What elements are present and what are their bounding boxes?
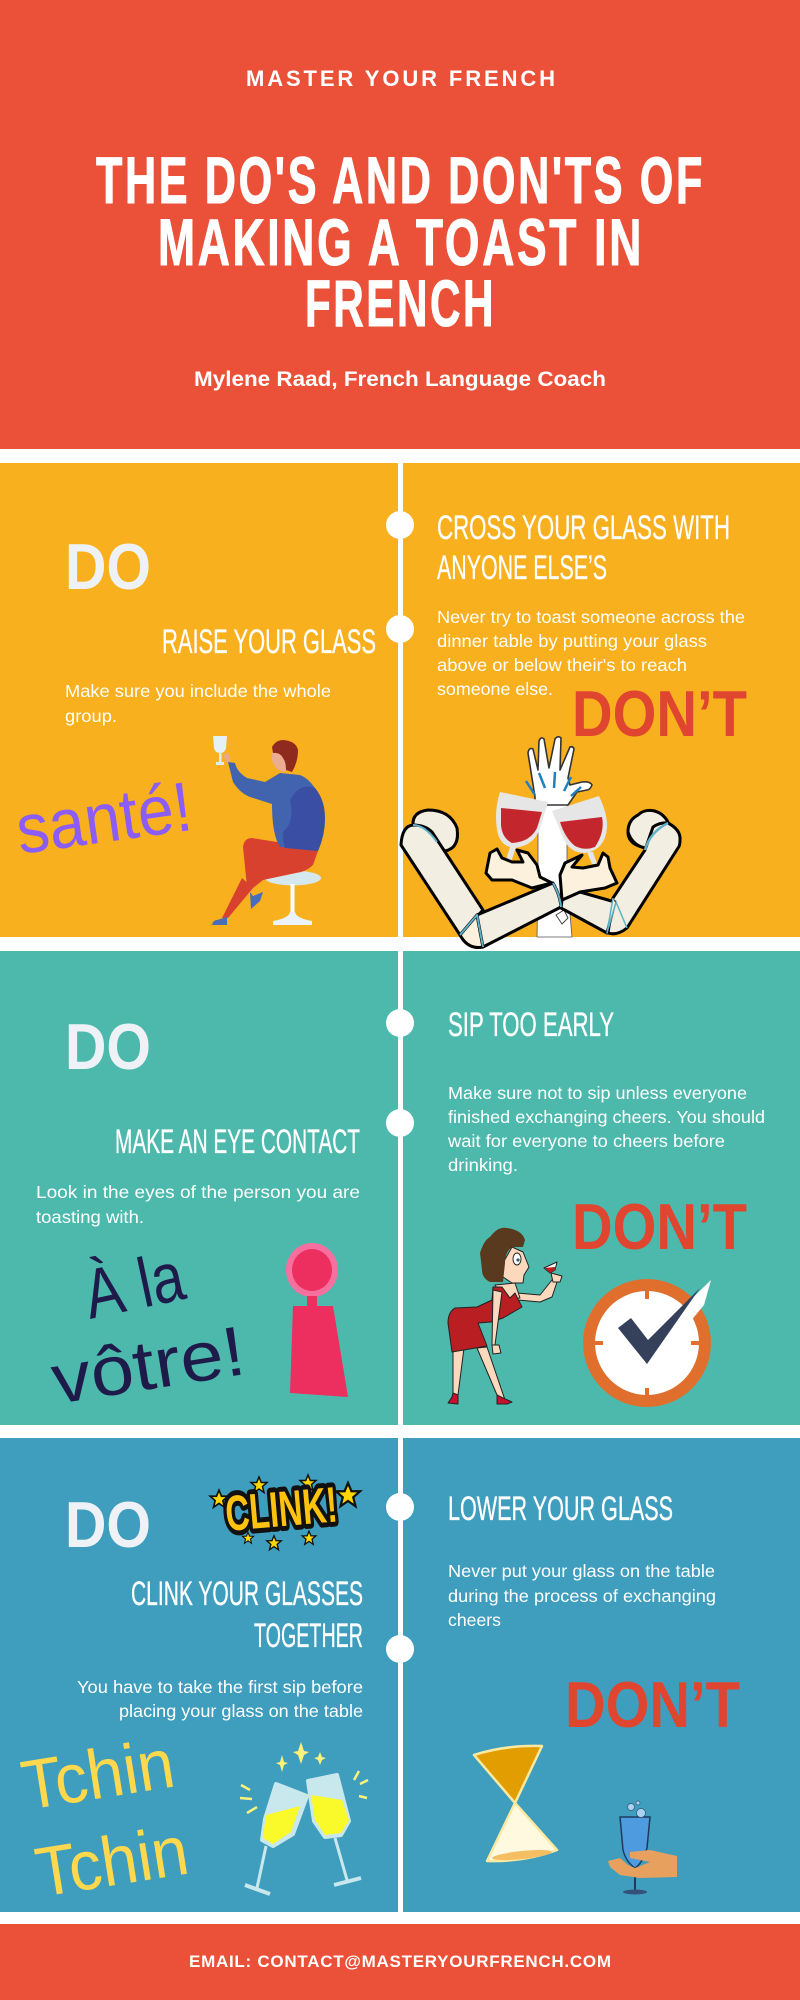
eyebrow: master your french: MASTER YOUR FRENCH xyxy=(246,66,555,91)
heading: clink your glasses together: TOGETHER xyxy=(254,1617,363,1655)
illustration: champagne glasses xyxy=(240,1742,368,1894)
heading: make an eye contact: MAKE AN EYE CONTACT xyxy=(115,1123,360,1161)
raised hand xyxy=(528,737,592,805)
body: cross your glass: someone else. xyxy=(437,679,553,699)
heading: clink your glasses together xyxy=(131,1575,363,1655)
right arm xyxy=(561,810,680,934)
illustration: hand holding a glass xyxy=(608,1801,677,1894)
DON'T label: DON’T xyxy=(565,1668,740,1741)
heading: raise your glass: RAISE YOUR GLASS xyxy=(162,623,376,661)
right hand xyxy=(560,853,617,900)
DO label: DO xyxy=(65,530,151,603)
panel: header xyxy=(0,0,800,449)
heading: clink your glasses together: CLINK YOUR GLASSES xyxy=(131,1575,363,1613)
illustration: woman sipping wine xyxy=(448,1228,562,1404)
left arm xyxy=(401,810,561,948)
body: lower your glass: cheers xyxy=(448,1610,501,1630)
body: sip too early: wait for everyone to cheers before xyxy=(447,1131,725,1151)
byline: Mylene Raad, French Language Coach xyxy=(194,368,606,391)
body: lower your glass: Never put your glass on the table xyxy=(448,1561,715,1581)
panel: clink glasses / lower your glass xyxy=(0,1438,800,1912)
body: raise your glass: group. xyxy=(65,706,117,726)
body: eye contact xyxy=(36,1182,360,1227)
timeline dots xyxy=(386,1009,414,1137)
illustration: seated man raising a glass xyxy=(212,736,325,925)
timeline dots xyxy=(386,511,414,643)
script: a la votre: vôtre! xyxy=(46,1311,250,1419)
illustration: clock with check mark xyxy=(583,1279,711,1407)
body: sip too early: Make sure not to sip unless everyone xyxy=(448,1083,747,1103)
body: raise your glass: Make sure you include the whole xyxy=(65,681,331,701)
panel: footer xyxy=(0,1924,800,2000)
script: tchin tchin xyxy=(16,1724,193,1912)
body: eye contact: Look in the eyes of the person you are xyxy=(36,1182,360,1202)
body: cross your glass: Never try to toast someone across the xyxy=(437,607,745,627)
panel: eye contact / sip too early xyxy=(0,951,800,1425)
script: tchin tchin: Tchin xyxy=(30,1811,193,1912)
DO label: DO xyxy=(65,1010,151,1083)
body: cross your glass: dinner table by putting your glass xyxy=(437,631,707,651)
title xyxy=(96,143,705,340)
body: raise your glass xyxy=(65,681,331,726)
body: lower your glass xyxy=(448,1561,716,1630)
body: sip too early xyxy=(447,1083,765,1175)
heading: lower your glass: LOWER YOUR GLASS xyxy=(448,1490,673,1528)
body: clink: You have to take the first sip before xyxy=(77,1677,363,1697)
body: sip too early: drinking. xyxy=(448,1155,518,1175)
body: clink: placing your glass on the table xyxy=(119,1701,363,1721)
body: sip too early: finished exchanging cheers. You should xyxy=(448,1107,765,1127)
heading: cross your glass: ANYONE ELSE’S xyxy=(437,549,607,587)
illustration: hourglass xyxy=(474,1746,557,1862)
script: sante: santé! xyxy=(11,767,196,869)
script: tchin tchin: Tchin xyxy=(16,1724,179,1825)
heading: cross your glass xyxy=(437,509,730,587)
panel: raise your glass / cross your glass xyxy=(0,463,800,948)
body: cross your glass xyxy=(437,607,745,699)
DO label: DO xyxy=(65,1488,151,1561)
wine glass right xyxy=(552,796,607,864)
DON'T label: DON’T xyxy=(572,1190,747,1263)
illustration: pink figure xyxy=(286,1243,348,1397)
DON'T label: DON’T xyxy=(572,677,747,750)
left hand xyxy=(486,849,552,888)
heading: sip too early: SIP TOO EARLY xyxy=(448,1006,614,1044)
body: lower your glass: during the process of exchanging xyxy=(448,1586,716,1606)
sticker: clink xyxy=(210,1475,360,1550)
title: FRENCH xyxy=(305,266,496,340)
footer email: EMAIL: CONTACT@MASTERYOURFRENCH.COM xyxy=(189,1952,611,1971)
body: eye contact: toasting with. xyxy=(36,1207,144,1227)
timeline dots xyxy=(386,1493,414,1663)
shirt xyxy=(537,805,572,937)
body: cross your glass: above or below their's to reach xyxy=(437,655,687,675)
body: clink xyxy=(77,1677,363,1721)
script: a la votre: À la xyxy=(77,1237,191,1334)
wine glass left xyxy=(496,792,548,862)
script: a la votre xyxy=(46,1237,250,1419)
illustration: crossed arms with wine glasses xyxy=(401,737,680,948)
sticker: clink: CLINK! xyxy=(223,1476,340,1542)
